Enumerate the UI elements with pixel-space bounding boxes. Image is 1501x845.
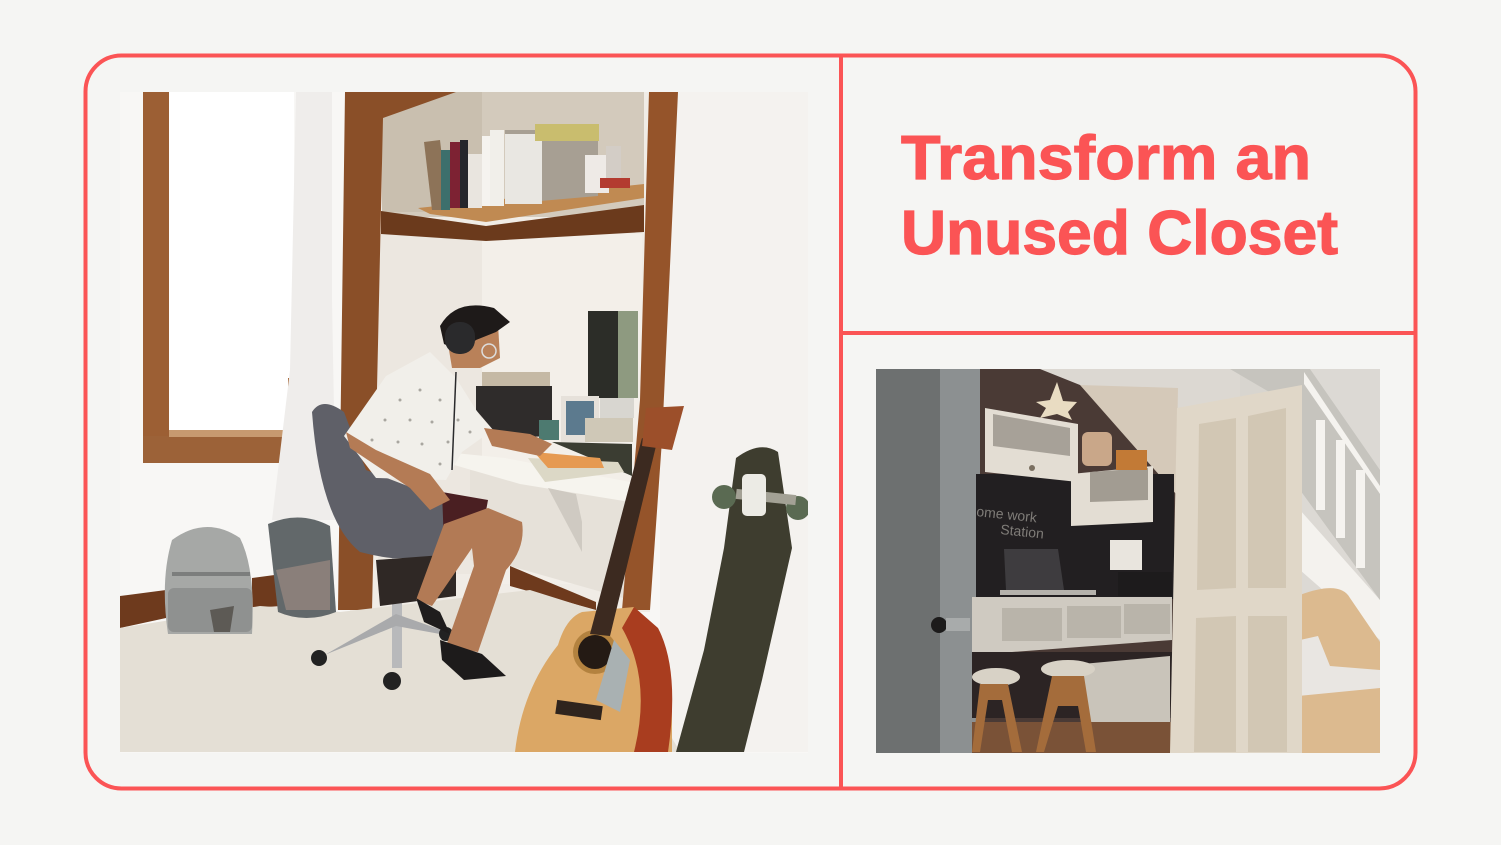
panel: photo of teen working at a closet desk (120, 92, 810, 753)
frame: rounded red outline with dividers (86, 55, 1416, 789)
window (143, 92, 169, 462)
title: Transform an (901, 124, 1311, 193)
keyboard (552, 442, 632, 476)
door frame right (622, 92, 678, 610)
dark area under desk (376, 554, 456, 606)
second cabinet (1071, 466, 1153, 526)
chalk writing line two: Station (1000, 521, 1045, 542)
glasses (482, 344, 496, 358)
right area behind door (1300, 369, 1380, 753)
closet interior (350, 92, 650, 612)
baseboard (120, 590, 166, 628)
wall right (660, 92, 808, 752)
white open door (1170, 385, 1302, 753)
staircase banister (1230, 369, 1380, 600)
shelf (381, 205, 644, 241)
backpack (165, 527, 253, 634)
boy: head (448, 330, 500, 368)
desk items (476, 386, 552, 438)
door knob (931, 617, 947, 633)
star decoration (1036, 382, 1077, 420)
upper cabinet (985, 408, 1078, 482)
boy: arms (346, 432, 450, 510)
floor (972, 722, 1172, 753)
wastebasket (268, 517, 336, 618)
guitar (515, 607, 672, 752)
closet back wall (980, 369, 1176, 722)
filing cabinet (1082, 656, 1170, 734)
books on shelf (424, 140, 442, 210)
title (901, 124, 1338, 268)
curtain (272, 92, 336, 520)
chair (312, 404, 444, 558)
title: Unused Closet (901, 199, 1338, 268)
longboard (676, 447, 792, 752)
chalk writing: ome work (976, 503, 1039, 525)
laptop (1004, 549, 1064, 590)
storage box (505, 130, 598, 204)
boy: legs (442, 492, 488, 526)
open left door (876, 369, 940, 753)
wooden bench (1298, 588, 1380, 753)
stools (972, 668, 1020, 686)
boy: torso and shirt (344, 352, 490, 480)
panel: photo of under-stairs closet office (876, 369, 1380, 753)
chalkboard (976, 474, 1174, 599)
carpet (120, 590, 680, 752)
door frame left (338, 92, 456, 610)
toys (1082, 432, 1112, 466)
desk with drawers (972, 597, 1172, 655)
monitor (588, 311, 618, 398)
under-desk dark (972, 652, 1172, 718)
ceiling slope (1040, 369, 1180, 408)
desk (455, 454, 626, 501)
